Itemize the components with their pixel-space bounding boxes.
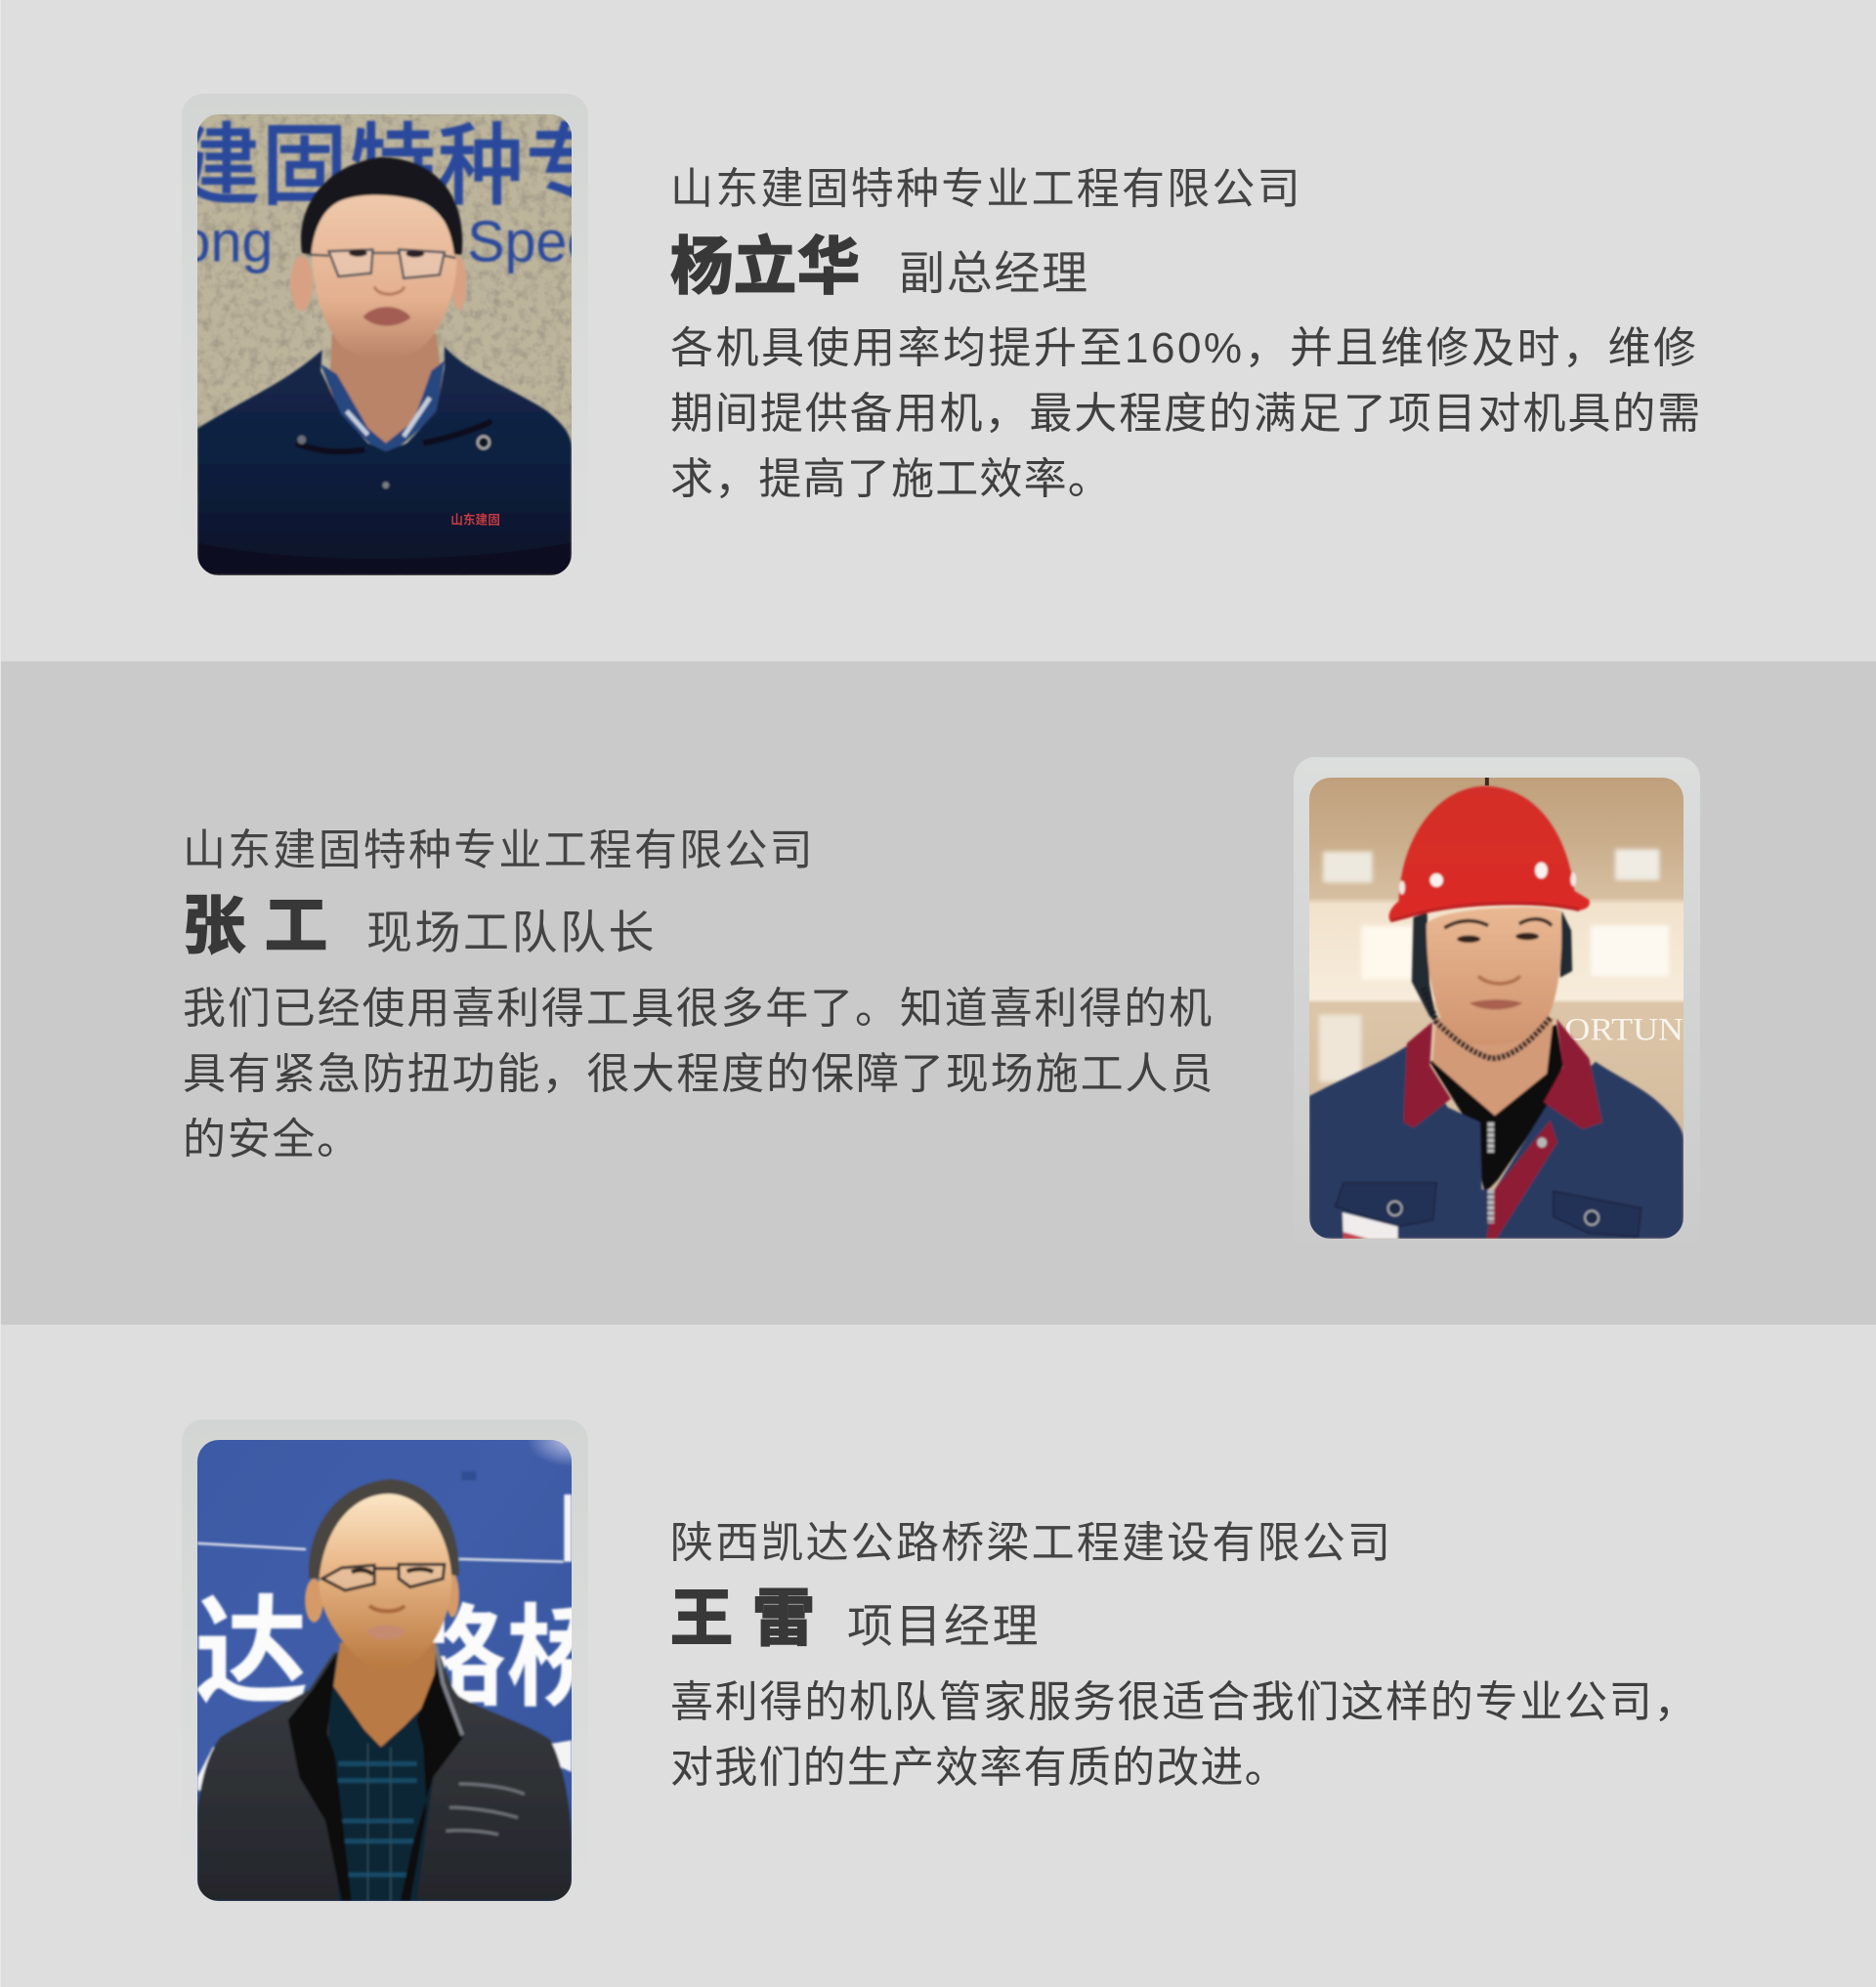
hair <box>301 157 462 255</box>
quote: Yang Lihua: 期间提供备用机，最大程度的满足了项目对机具的需 <box>670 390 1702 438</box>
mouth <box>1470 999 1522 1009</box>
name: Zhang Gong: 张 工 <box>183 891 327 961</box>
shirt collar <box>320 360 445 458</box>
job title: Yang Lihua: 副总经理 <box>899 247 1089 299</box>
placket <box>1487 1120 1557 1239</box>
photo: Yang Lihua portrait: 山东建固 <box>450 512 500 528</box>
glasses <box>322 1564 445 1590</box>
photo: Wang Lei portrait <box>197 1440 572 1901</box>
reflective strip <box>1343 1212 1398 1239</box>
mouth <box>362 307 411 326</box>
name: Yang Lihua: 杨立华 <box>670 232 861 302</box>
neck <box>328 334 445 451</box>
black collar <box>288 1653 352 1901</box>
jacket <box>197 1653 572 1901</box>
quote: Wang Lei: 对我们的生产效率有质的改进。 <box>670 1744 1289 1792</box>
panel: testimonial Wang Lei <box>182 1419 1698 1901</box>
nose <box>374 286 405 294</box>
shirt <box>328 1672 438 1901</box>
brows and eyes <box>1444 919 1552 928</box>
straps <box>1412 912 1436 1022</box>
chin strap <box>1424 988 1550 1058</box>
quote: Yang Lihua: 各机具使用率均提升至160%，并且维修及时，维修 <box>670 324 1699 372</box>
ears <box>290 256 313 311</box>
quote: Yang Lihua <box>670 324 1702 503</box>
zipper <box>1481 1122 1501 1223</box>
photo frame: Zhang Gong <box>1294 757 1700 1259</box>
photo frame: Yang Lihua <box>182 94 588 596</box>
company: Yang Lihua: 山东建固特种专业工程有限公司 <box>670 165 1302 213</box>
mouth <box>366 1626 407 1640</box>
panel: testimonial Yang Lihua <box>182 94 1702 575</box>
quote: Zhang Gong: 我们已经使用喜利得工具很多年了。知道喜利得的机 <box>183 985 1214 1033</box>
quote: Zhang Gong: 的安全。 <box>183 1116 362 1163</box>
jacket <box>197 347 572 575</box>
face <box>319 1494 452 1669</box>
quote: Wang Lei <box>670 1678 1698 1792</box>
hair <box>309 1479 459 1579</box>
neck <box>333 1642 437 1747</box>
pocket <box>296 421 491 451</box>
quote: Zhang Gong <box>183 985 1215 1163</box>
photo: Yang Lihua portrait <box>197 114 572 575</box>
glasses <box>309 249 456 278</box>
panel: testimonial Zhang Gong <box>183 757 1700 1239</box>
quilting lines <box>447 1784 525 1835</box>
photo: Zhang Gong portrait <box>1309 778 1684 1239</box>
name: Wang Lei: 王 雷 <box>670 1584 815 1654</box>
job title: Wang Lei: 项目经理 <box>847 1600 1041 1652</box>
collar right <box>1544 1019 1602 1129</box>
nose <box>1478 976 1520 984</box>
jacket <box>1309 1043 1684 1239</box>
black lining <box>1429 1025 1563 1193</box>
eyes <box>349 249 367 257</box>
face <box>1427 908 1561 1045</box>
face <box>311 192 456 359</box>
ears <box>305 1579 323 1623</box>
pockets <box>1336 1183 1436 1227</box>
dark lower region <box>197 542 572 575</box>
panel: background band middle <box>0 661 1876 1325</box>
neck <box>1433 1018 1554 1116</box>
quote: Zhang Gong: 具有紧急防扭功能，很大程度的保障了现场施工人员 <box>183 1050 1215 1098</box>
job title: Zhang Gong: 现场工队队长 <box>366 907 657 958</box>
quote: Wang Lei: 喜利得的机队管家服务很适合我们这样的专业公司， <box>670 1678 1698 1726</box>
quote: Yang Lihua: 求，提高了施工效率。 <box>670 455 1112 503</box>
nose <box>369 1606 405 1611</box>
collar left <box>1404 1022 1451 1127</box>
company: Wang Lei: 陕西凯达公路桥梁工程建设有限公司 <box>670 1519 1392 1567</box>
photo: Wang Lei portrait: 达 <box>197 1587 309 1718</box>
photo frame: Wang Lei <box>182 1419 588 1922</box>
company: Zhang Gong: 山东建固特种专业工程有限公司 <box>183 826 815 874</box>
helmet <box>1389 786 1590 922</box>
photo: Zhang Gong portrait: ORTUN <box>1564 1011 1684 1047</box>
